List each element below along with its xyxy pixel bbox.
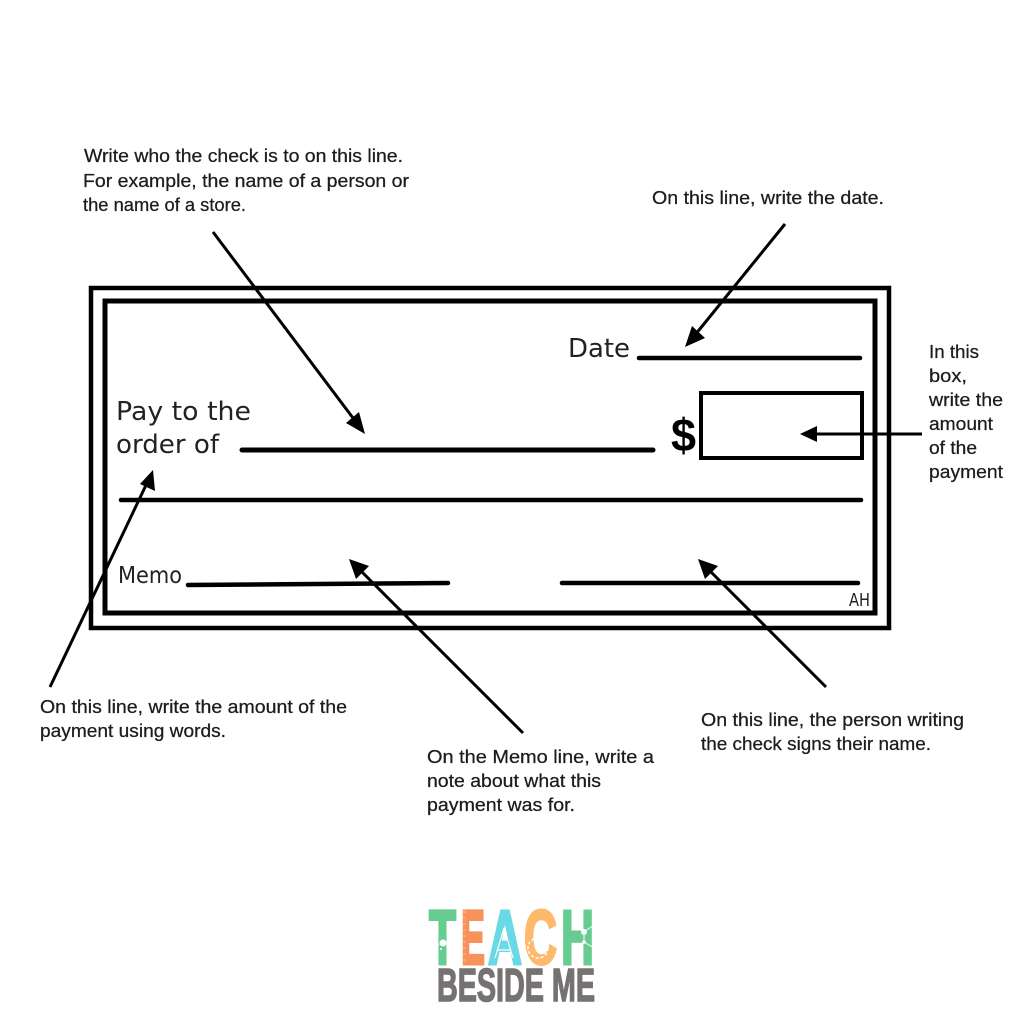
logo detail: compass on A <box>495 928 513 958</box>
callout: signature: the check signs their name. <box>701 734 931 754</box>
arrow: written amount line <box>50 470 155 687</box>
callout: signature: On this line, the person writing <box>701 710 964 730</box>
arrow: signature line <box>698 559 826 687</box>
callout: amount box: In this <box>929 342 979 362</box>
callout: amount box: box, <box>929 366 967 386</box>
memo label: Memo <box>118 563 182 589</box>
callout: written amount: On this line, write the amount of the <box>40 697 347 717</box>
check form <box>91 288 889 628</box>
callout: amount box: of the <box>929 438 977 458</box>
outer border <box>91 288 889 628</box>
callout: memo: payment was for. <box>427 795 575 815</box>
memo line <box>188 583 448 585</box>
callout: payee <box>83 146 409 215</box>
callout: amount box: amount <box>929 414 993 434</box>
logo wordmark: TEACH: T <box>429 895 456 981</box>
logo wordmark: TEACH: H <box>561 895 594 981</box>
inner border <box>105 301 875 613</box>
arrow: amount box <box>800 426 922 442</box>
pay to the order of label <box>116 397 251 460</box>
callout: memo <box>427 747 655 815</box>
logo wordmark: BESIDE ME: BESIDE ME <box>437 959 595 1011</box>
logo wordmark: TEACH: E <box>461 895 485 981</box>
callout: payee: For example, the name of a person or <box>83 171 409 191</box>
dollar sign: $ <box>671 409 696 461</box>
signature line <box>562 581 858 585</box>
logo wordmark: TEACH: C <box>524 895 557 981</box>
pay to the order of label: order of <box>116 430 220 460</box>
callout: written amount <box>40 697 347 741</box>
logo detail: ruler ticks on E <box>463 912 466 960</box>
callout: signature <box>701 710 964 754</box>
logo wordmark: TEACH: A <box>488 895 522 981</box>
date label: Date <box>568 334 630 364</box>
logo detail: molecule on H <box>582 924 595 949</box>
written amount line <box>121 498 861 502</box>
callout: written amount: payment using words. <box>40 721 226 741</box>
callout: amount box: write the <box>928 390 1003 410</box>
arrow: payee line <box>213 232 365 434</box>
callout: date: On this line, write the date. <box>652 188 884 208</box>
payee line <box>242 448 653 452</box>
amount box <box>701 393 862 458</box>
initials: AH <box>849 590 870 611</box>
arrow: date line <box>685 224 785 347</box>
date line <box>639 356 860 360</box>
callout: amount box: payment <box>929 462 1003 482</box>
pay to the order of label: Pay to the <box>116 397 251 427</box>
callout: amount box <box>928 342 1003 482</box>
logo detail: splat on T <box>437 939 450 950</box>
callout: memo: note about what this <box>427 771 601 791</box>
callout: payee: Write who the check is to on this line. <box>84 146 403 166</box>
logo: Teach Beside Me <box>429 895 595 1011</box>
arrow: memo line <box>349 559 523 733</box>
logo detail: gear on C <box>528 938 548 958</box>
logo wordmark: TEACH <box>429 895 594 981</box>
callout: payee: the name of a store. <box>83 195 246 215</box>
callout: memo: On the Memo line, write a <box>427 747 655 767</box>
